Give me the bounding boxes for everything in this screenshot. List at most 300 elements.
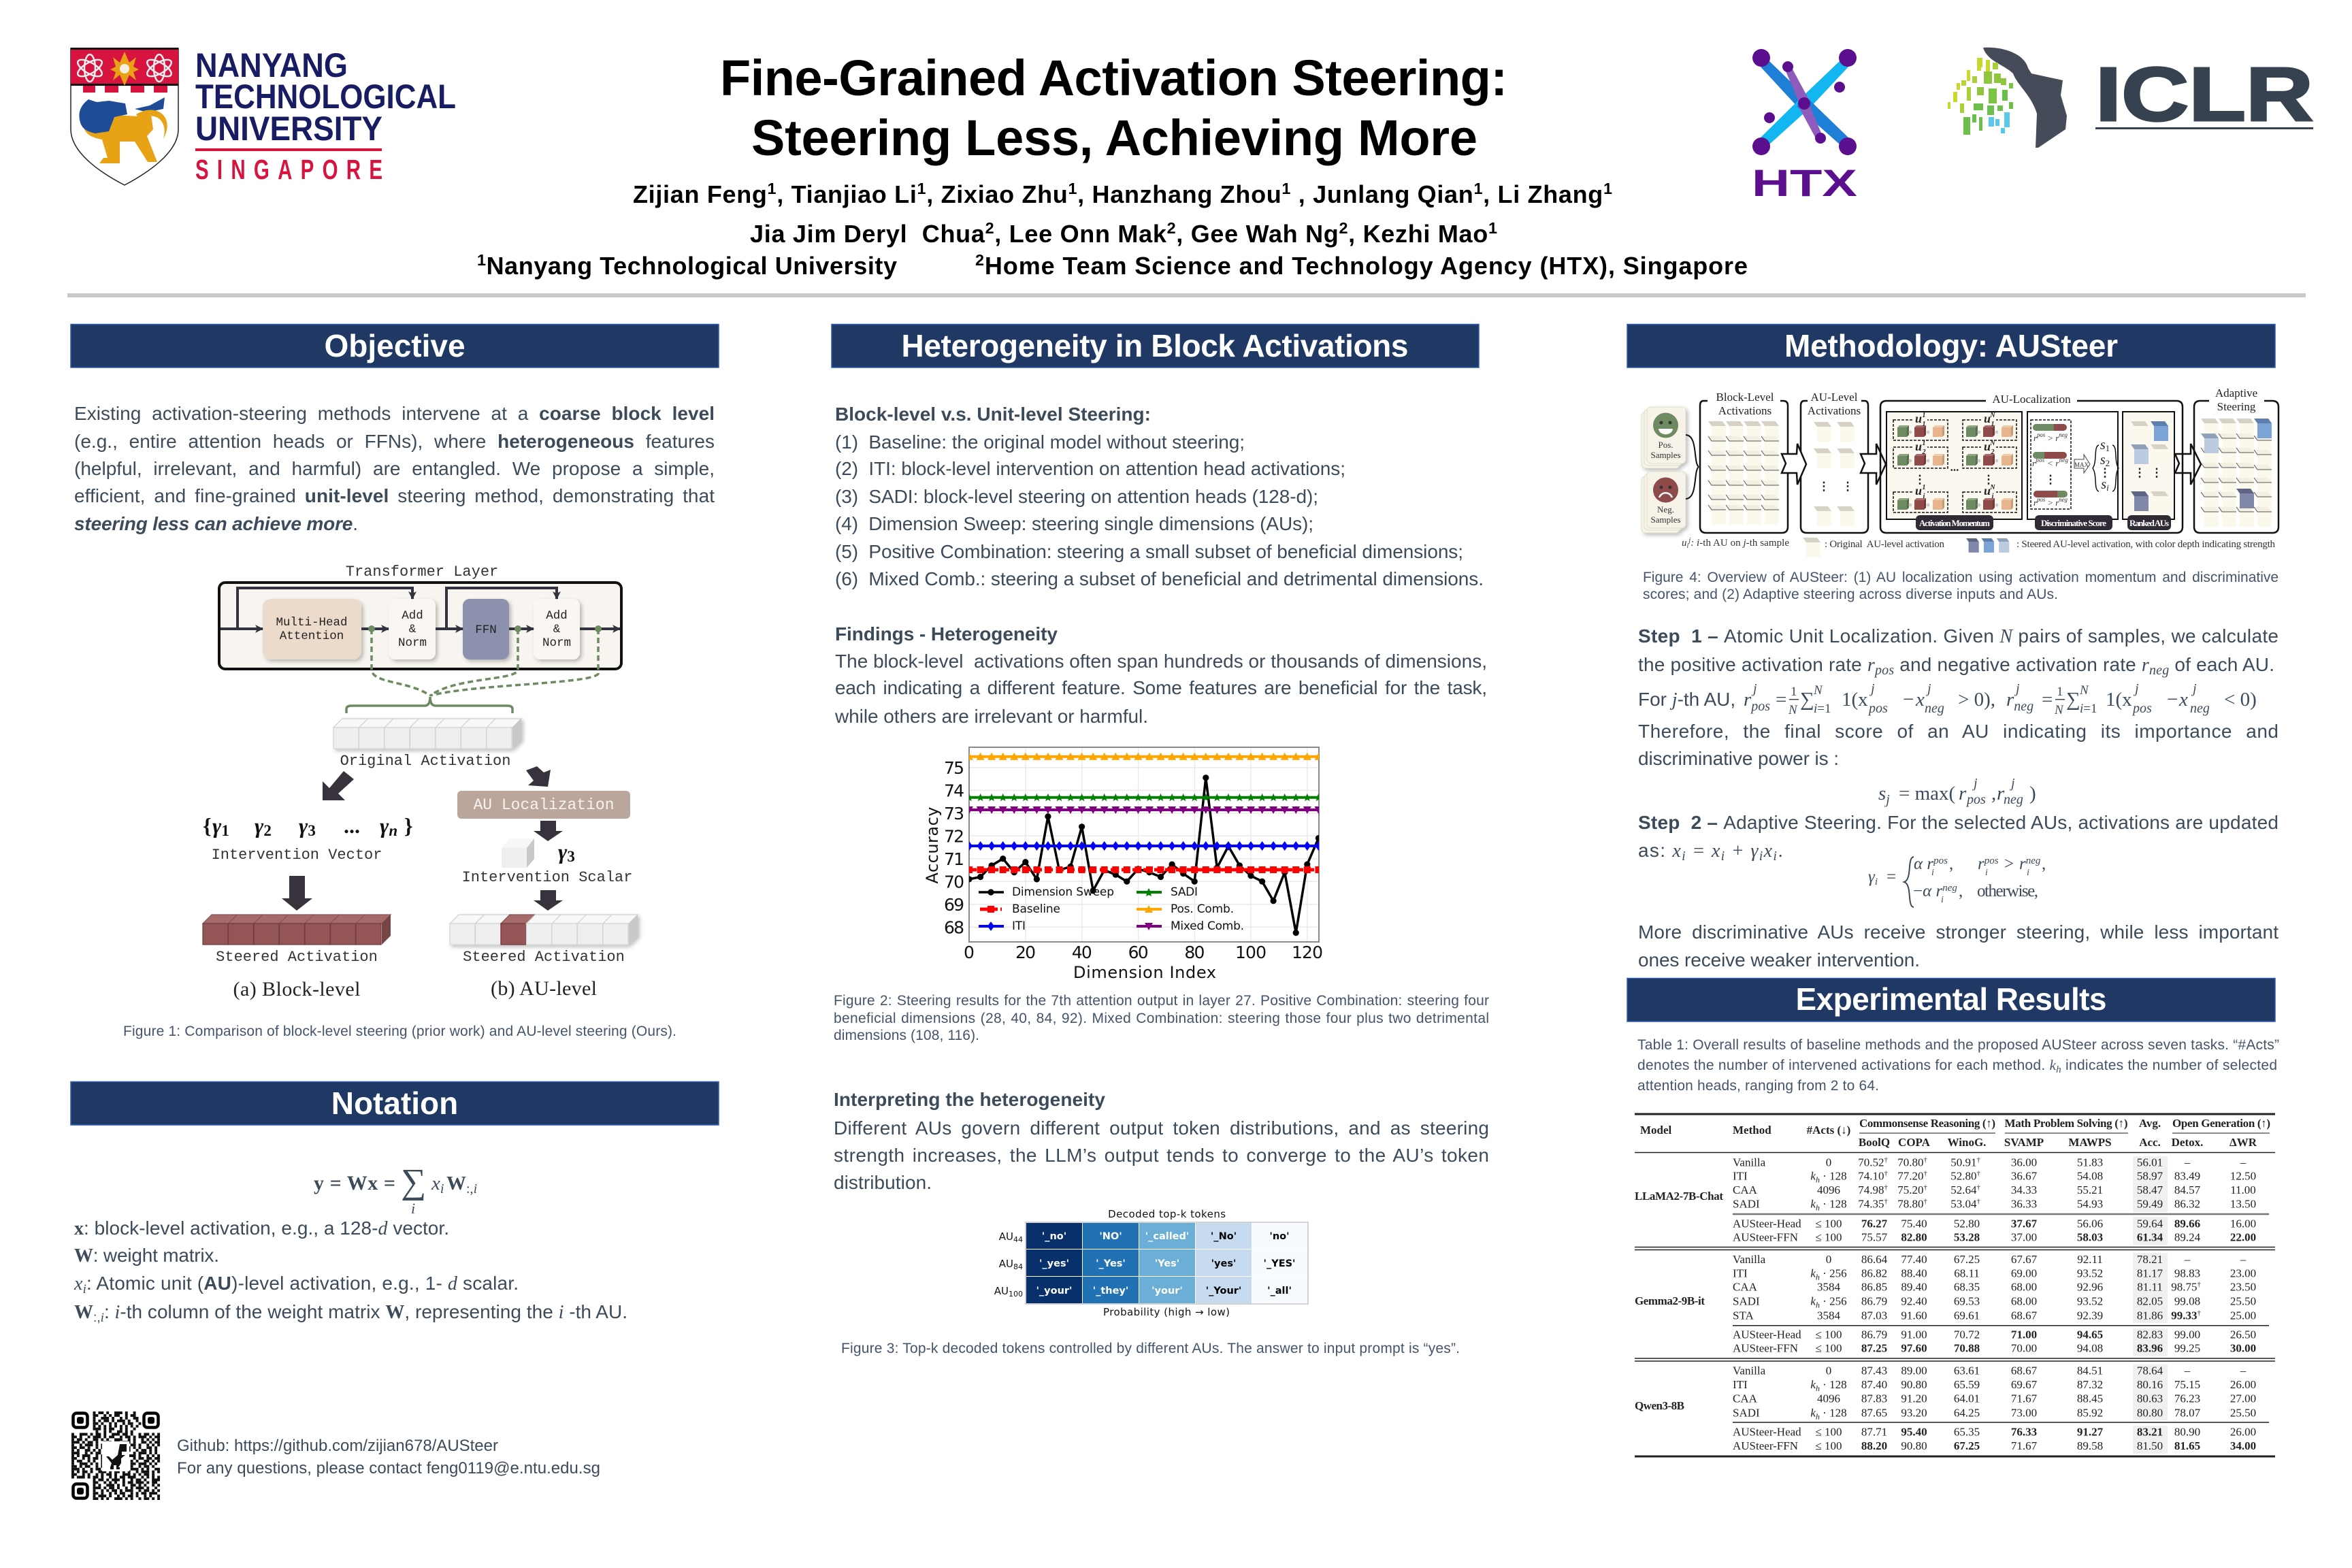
rows: Qwen3-8B: 25.50 <box>2230 1407 2256 1420</box>
rows: LLaMA2-7B-Chat: 76.27 <box>1861 1217 1888 1230</box>
rows: Gemma2-9B-it: 98.75† <box>2171 1281 2201 1294</box>
rows: Gemma2-9B-it: AUSteer-Head <box>1733 1328 1801 1341</box>
rows: LLaMA2-7B-Chat: 36.00 <box>2011 1156 2037 1169</box>
y axis ticks <box>944 758 964 938</box>
heatmap: decoded top-k tokens: '_YES' <box>1264 1258 1295 1269</box>
heading: Objective <box>71 324 719 368</box>
diagram: transformer layer block: Multi-Head <box>276 616 348 630</box>
equation: activation rates: < 0) <box>2224 689 2257 710</box>
equation: gamma piecewise: i <box>1985 868 1988 878</box>
authors and affiliations: Zijian Feng1, Tianjiao Li1, Zixiao Zhu1, Hanzhang Zhou1 , Junlang Qian1, Li Zhang1 <box>633 180 1612 208</box>
rows: Gemma2-9B-it: 70.00 <box>2011 1342 2037 1355</box>
text block: step 2 <box>1638 812 2278 864</box>
table header: Model <box>1640 1124 1672 1137</box>
rows: Gemma2-9B-it: 91.60 <box>1901 1309 1927 1322</box>
title: Steering Less, Achieving More <box>751 110 1477 166</box>
heatmap: decoded top-k tokens: '_Yes' <box>1096 1258 1126 1269</box>
figure legend: : Steered AU-level activation, with color depth indicating strength <box>2016 539 2276 550</box>
title: Fine-Grained Activation Steering: <box>720 50 1507 106</box>
rows: LLaMA2-7B-Chat: – <box>2184 1156 2191 1169</box>
icon: NTU shield <box>71 48 178 185</box>
rows: Gemma2-9B-it: 99.08 <box>2174 1295 2200 1308</box>
rows: Qwen3-8B: 87.83 <box>1861 1392 1887 1405</box>
logo wordmark: NANYANG <box>195 46 348 84</box>
equation: activation rates: j <box>2014 681 2020 696</box>
intervention vector gammas: } <box>404 813 413 838</box>
table header: COPA <box>1898 1136 1931 1149</box>
discriminative score <box>2031 420 2119 509</box>
rows: LLaMA2-7B-Chat: kh · 128 <box>1810 1169 1847 1184</box>
rows: LLaMA2-7B-Chat: 56.06 <box>2077 1217 2103 1230</box>
rows: Gemma2-9B-it: 92.39 <box>2077 1309 2103 1322</box>
activation momentum cells: u <box>1915 412 1922 425</box>
table caption: Table 1: Overall results of baseline methods and the proposed AUSteer across seven tasks. “#Acts” <box>1637 1037 2279 1053</box>
ranked AUs: ⋮ <box>2134 466 2145 479</box>
results table <box>1635 1114 2275 1456</box>
rows: Qwen3-8B: 68.67 <box>2011 1364 2038 1377</box>
table header: Open Generation (↑) <box>2172 1117 2270 1130</box>
figure legend: : Original AU-level activation <box>1825 539 1945 550</box>
equation: final score: j <box>1972 776 1978 791</box>
table header: Commonsense Reasoning (↑) <box>1859 1117 1995 1130</box>
AU-level activations box: ⋮ <box>1842 480 1854 493</box>
table header: ΔWR <box>2230 1136 2257 1149</box>
AU-level activations box: Activations <box>1808 404 1861 417</box>
x axis ticks: 100 <box>1235 943 1267 962</box>
text block: interpreting the heterogeneity: Different AUs govern different output token distributions, and as steering <box>834 1117 1489 1139</box>
heatmap: decoded top-k tokens: '_called' <box>1145 1231 1189 1242</box>
activation momentum cells: u <box>1915 440 1922 453</box>
heading: Notation: Notation <box>331 1085 458 1121</box>
authors and affiliations: Jia Jim Deryl Chua2, Lee Onn Mak2, Gee Wah Ng2, Kezhi Mao1 <box>750 219 1497 248</box>
text block: step 1: discriminative power is : <box>1638 748 1839 769</box>
y axis ticks: 68 <box>944 917 964 938</box>
header divider <box>67 293 2306 297</box>
y axis ticks: 70 <box>944 872 964 892</box>
text block: objective description: (e.g., entire attention heads or FFNs), where heterogeneous features <box>74 431 715 452</box>
table header: WinoG. <box>1948 1136 1986 1149</box>
authors and affiliations <box>477 180 1748 280</box>
equation: activation rates: ∑ <box>1800 689 1814 710</box>
rows: LLaMA2-7B-Chat: SADI <box>1733 1197 1760 1210</box>
text block: interpreting the heterogeneity: strength increases, the LLM’s output tends to converge to the AU’s token <box>834 1145 1489 1166</box>
rows: LLaMA2-7B-Chat: 89.66 <box>2174 1217 2200 1230</box>
chart legend: Baseline <box>1012 902 1060 916</box>
rows: LLaMA2-7B-Chat: 77.20† <box>1897 1169 1927 1182</box>
sample cards <box>1642 407 1699 533</box>
rows: Qwen3-8B: 76.23 <box>2174 1392 2200 1405</box>
activation momentum cells: N <box>1989 440 1995 447</box>
equation: activation rates: 1(x <box>2106 689 2132 710</box>
rows: Qwen3-8B: AUSteer-Head <box>1733 1425 1801 1438</box>
heading: Methodology: Methodology: AUSteer <box>1784 328 2118 363</box>
diagram: transformer layer block <box>219 583 621 669</box>
rows: Gemma2-9B-it: 26.50 <box>2230 1328 2256 1341</box>
rows: Qwen3-8B: CAA <box>1733 1392 1758 1405</box>
rows: Qwen3-8B: 71.67 <box>2011 1392 2038 1405</box>
rows: Gemma2-9B-it: 23.50 <box>2230 1281 2256 1294</box>
activation momentum cells: u <box>1915 484 1922 497</box>
intervention vector gammas: ... <box>344 813 360 838</box>
equation: activation rates: > 0), <box>1958 689 1995 710</box>
equation: gamma piecewise: i <box>1941 895 1944 905</box>
rows: Gemma2-9B-it: 69.61 <box>1954 1309 1980 1322</box>
table header: SVAMP <box>2004 1136 2044 1149</box>
x axis ticks: 20 <box>1015 943 1036 962</box>
label: Original Activation: Original Activation <box>340 753 510 770</box>
figure 3 caption: Figure 3: Top-k decoded tokens controlled by different AUs. The answer to input prompt is “yes”. <box>841 1341 1460 1356</box>
rows: LLaMA2-7B-Chat: 13.50 <box>2230 1197 2256 1210</box>
axis title: Accuracy: Accuracy <box>923 807 942 883</box>
equation: y = Wx: ∑ <box>401 1162 426 1201</box>
intervention vector gammas: γ2 <box>255 813 272 839</box>
rows: Gemma2-9B-it: 68.11 <box>1954 1267 1980 1280</box>
rows: Qwen3-8B: 75.15 <box>2174 1378 2200 1391</box>
rows: Gemma2-9B-it: 25.50 <box>2230 1295 2256 1308</box>
rows: Gemma2-9B-it: 25.00 <box>2230 1309 2256 1322</box>
equation: gamma piecewise: , <box>2042 855 2046 873</box>
chart legend <box>979 885 1244 933</box>
panel: Objective <box>71 324 719 1039</box>
rows: Qwen3-8B: kh · 128 <box>1810 1378 1847 1393</box>
arrow: vector to steered <box>282 876 312 911</box>
text block: step 1: the positive activation rate rpos and negative activation rate rneg of each AU. <box>1638 654 2274 678</box>
chart legend: Pos. Comb. <box>1171 902 1234 916</box>
rows: Gemma2-9B-it: 71.00 <box>2011 1328 2037 1341</box>
rows: Gemma2-9B-it: 3584 <box>1817 1281 1840 1294</box>
discriminative score: s1 <box>2100 438 2110 453</box>
rows: Gemma2-9B-it: 98.83 <box>2174 1267 2200 1280</box>
y axis ticks: 73 <box>944 804 964 823</box>
contact text <box>177 1437 600 1477</box>
equation: final score: , <box>1991 783 1996 804</box>
activation momentum cells: 1 <box>1991 421 1994 428</box>
rows: Gemma2-9B-it: 86.85 <box>1861 1281 1887 1294</box>
rows: Qwen3-8B: ≤ 100 <box>1815 1439 1842 1452</box>
rows: Gemma2-9B-it: 86.64 <box>1861 1253 1888 1266</box>
rows: Qwen3-8B: 80.63 <box>2137 1392 2163 1405</box>
equation: activation rates: x <box>2178 689 2188 710</box>
rows: Qwen3-8B: 85.92 <box>2077 1407 2103 1420</box>
heatmap: decoded top-k tokens: '_they' <box>1093 1286 1128 1296</box>
rows: Qwen3-8B: 27.00 <box>2230 1392 2256 1405</box>
equation: activation rates: rpos <box>1744 689 1770 714</box>
figure 2 caption: Figure 2: Steering results for the 7th attention output in layer 27. Positive Combination: steering four <box>834 993 1489 1009</box>
rows: Gemma2-9B-it: 0 <box>1826 1253 1831 1266</box>
equation: gamma piecewise: rpos <box>1978 855 1999 873</box>
rows: Gemma2-9B-it: 89.40 <box>1901 1281 1927 1294</box>
rows: Qwen3-8B: 64.01 <box>1954 1392 1980 1405</box>
rows: Qwen3-8B: 63.61 <box>1954 1364 1980 1377</box>
chart legend: Mixed Comb. <box>1171 919 1244 933</box>
equation: y = Wx: xi <box>431 1173 444 1196</box>
rows: Gemma2-9B-it: – <box>2240 1253 2247 1266</box>
logo: HTX <box>1752 49 1857 204</box>
AU-Localization box <box>1880 393 2183 533</box>
equation: gamma piecewise: rneg <box>2019 855 2041 873</box>
rows: Gemma2-9B-it: 87.25 <box>1861 1342 1887 1355</box>
y axis ticks: 74 <box>944 781 964 800</box>
rows: LLaMA2-7B-Chat: ≤ 100 <box>1815 1217 1842 1230</box>
text block: block vs unit level: (5) Positive Combination: steering a small subset of beneficial dimensions; <box>835 541 1463 562</box>
rows: LLaMA2-7B-Chat: 70.80† <box>1897 1156 1927 1169</box>
rows: LLaMA2-7B-Chat: 52.80† <box>1950 1169 1980 1182</box>
rows: Gemma2-9B-it: 94.65 <box>2077 1328 2103 1341</box>
rows: Gemma2-9B-it: SADI <box>1733 1295 1760 1308</box>
panel: Experimental Results <box>1627 979 2279 1456</box>
logo wordmark <box>195 46 456 185</box>
original activation cubes <box>333 719 521 749</box>
rows: Qwen3-8B: – <box>2240 1364 2247 1377</box>
heading: Heterogeneity <box>832 324 1479 368</box>
chart legend: SADI <box>1171 885 1198 899</box>
discriminative score: rpos < rneg <box>2032 457 2069 468</box>
rows: Qwen3-8B: 81.65 <box>2174 1439 2200 1452</box>
rows: Gemma2-9B-it: 82.83 <box>2137 1328 2163 1341</box>
equation: gamma piecewise: = <box>1886 868 1896 886</box>
rows: LLaMA2-7B-Chat: 52.64† <box>1950 1183 1980 1196</box>
rows: Gemma2-9B-it: 81.86 <box>2137 1309 2163 1322</box>
heatmap: decoded top-k tokens: Decoded top-k tokens <box>1108 1208 1226 1220</box>
equation: final score: j <box>2009 776 2015 791</box>
heading: Notation <box>71 1082 719 1125</box>
QR code <box>71 1413 160 1499</box>
ranked AUs <box>2131 421 2168 511</box>
heatmap: decoded top-k tokens: 'NO' <box>1099 1231 1122 1242</box>
chart legend: ITI <box>1012 919 1026 933</box>
text block: block vs unit level: Block-level v.s. Unit-level Steering: <box>835 404 1151 425</box>
heading: Methodology <box>1627 324 2275 368</box>
rows: Qwen3-8B: 89.00 <box>1901 1364 1927 1377</box>
text block: notation definitions: W:,i: i-th column of the weight matrix W, representing the i -th AU. <box>74 1301 627 1325</box>
text block: interpreting the heterogeneity <box>834 1089 1489 1193</box>
AU-Localization box: AU-Localization <box>1992 393 2071 406</box>
rows: Gemma2-9B-it: 68.35 <box>1954 1281 1980 1294</box>
chart legend: Dimension Sweep <box>1012 885 1114 899</box>
y axis ticks: 71 <box>944 849 964 869</box>
rows: Gemma2-9B-it <box>1733 1253 2256 1355</box>
rows: Qwen3-8B: 87.43 <box>1861 1364 1887 1377</box>
rows: Gemma2-9B-it: 68.67 <box>2011 1309 2038 1322</box>
rows: Gemma2-9B-it: 97.60 <box>1901 1342 1927 1355</box>
text block: discriminative steering note: More discriminative AUs receive stronger steering, while less important <box>1638 921 2278 943</box>
rows: LLaMA2-7B-Chat: Vanilla <box>1733 1156 1766 1169</box>
equation: final score: neg <box>2004 792 2023 807</box>
connector: dashed activations into brace <box>346 629 598 713</box>
diagram: transformer layer block: & <box>409 623 416 636</box>
rows: Qwen3-8B: 91.27 <box>2077 1425 2104 1438</box>
equation: final score: r <box>1959 783 1967 804</box>
rows: LLaMA2-7B-Chat: 59.64 <box>2137 1217 2163 1230</box>
adaptive steering box: Adaptive <box>2215 387 2257 399</box>
rows: Qwen3-8B: ITI <box>1733 1378 1748 1391</box>
equation: activation rates: 1 <box>2057 685 2063 699</box>
heatmap: decoded top-k tokens: '_your' <box>1036 1286 1073 1296</box>
equation: activation rates: i=1 <box>2080 702 2097 716</box>
table caption: attention heads, ranging from 2 to 64. <box>1637 1078 1879 1094</box>
activation momentum cells: 1 <box>1922 421 1926 428</box>
rows: Gemma2-9B-it: STA <box>1733 1309 1754 1322</box>
icon: head silhouette <box>1983 48 2067 148</box>
avg column shading <box>2133 1156 2168 1454</box>
rows: Qwen3-8B: 34.00 <box>2230 1439 2256 1452</box>
rows: Gemma2-9B-it: 83.96 <box>2137 1342 2163 1355</box>
activation momentum cells: 1 <box>1922 484 1926 491</box>
model labels: Gemma2-9B-it <box>1635 1294 1705 1307</box>
equation: y = Wx: W:,i <box>446 1173 477 1196</box>
rows: Qwen3-8B: 80.80 <box>2137 1407 2163 1420</box>
logo text ICLR: ICLR <box>2095 52 2313 137</box>
text block: step 1: Therefore, the final score of an AU indicating its importance and <box>1638 721 2278 742</box>
rows: Qwen3-8B: 91.20 <box>1901 1392 1927 1405</box>
heatmap: decoded top-k tokens: '_yes' <box>1039 1258 1069 1269</box>
diagram: transformer layer block: Norm <box>398 636 427 650</box>
rows: Qwen3-8B: 78.64 <box>2137 1364 2163 1377</box>
equation: gamma piecewise <box>1868 855 2046 907</box>
contact text: For any questions, please contact feng0119@e.ntu.edu.sg <box>177 1459 600 1477</box>
text block: findings <box>834 623 1487 727</box>
rows: LLaMA2-7B-Chat: 53.04† <box>1950 1197 1980 1210</box>
heading: Objective: Objective <box>324 328 466 363</box>
icon: pixel squares <box>1948 58 2013 135</box>
figure 4 caption: scores; and (2) Adaptive steering across diverse inputs and AUs. <box>1643 587 2058 602</box>
block-level activations box <box>1700 391 1788 533</box>
rows: Gemma2-9B-it: 67.25 <box>1954 1253 1980 1266</box>
rows: LLaMA2-7B-Chat: AUSteer-Head <box>1733 1217 1801 1230</box>
rows: LLaMA2-7B-Chat: 11.00 <box>2230 1183 2256 1196</box>
table header: Acc. <box>2139 1136 2161 1149</box>
x axis ticks: 120 <box>1292 943 1323 962</box>
rows: Gemma2-9B-it: 68.00 <box>2011 1281 2037 1294</box>
scalar cube and gamma: γ3 <box>558 839 575 865</box>
figure 2 caption <box>834 993 1489 1043</box>
rows: Gemma2-9B-it: 92.40 <box>1901 1295 1927 1308</box>
logo: ICLR <box>1948 48 2313 148</box>
text block: notation definitions: xi: Atomic unit (AU)-level activation, e.g., 1- d scalar. <box>74 1273 519 1296</box>
rows: Qwen3-8B: 87.65 <box>1861 1407 1887 1420</box>
label: Transformer Layer: Transformer Layer <box>346 564 498 581</box>
heading: Experimental Results: Experimental Results <box>1795 981 2107 1017</box>
heatmap: decoded top-k tokens: 'yes' <box>1211 1258 1236 1269</box>
text block: block vs unit level: (2) ITI: block-level intervention on attention head activations; <box>835 458 1345 479</box>
heatmap: decoded top-k tokens: '_No' <box>1211 1231 1237 1242</box>
text block: discriminative steering note: ones receive weaker intervention. <box>1638 949 1920 970</box>
rows: LLaMA2-7B-Chat: 22.00 <box>2230 1230 2256 1243</box>
heatmap: decoded top-k tokens: AU44 <box>999 1230 1023 1244</box>
rows: Gemma2-9B-it: 81.17 <box>2137 1267 2163 1280</box>
rows: Qwen3-8B: 95.40 <box>1901 1425 1927 1438</box>
equation: y = Wx: i <box>411 1200 415 1217</box>
equation: gamma piecewise: α rpos <box>1914 855 1948 873</box>
contact text: Github: https://github.com/zijian678/AUSteer <box>177 1437 498 1455</box>
x axis ticks <box>964 943 1323 962</box>
rows: Gemma2-9B-it: 86.79 <box>1861 1328 1887 1341</box>
equation: activation rates: neg <box>2190 701 2210 716</box>
rows: Qwen3-8B: 88.20 <box>1861 1439 1887 1452</box>
equation: activation rates: 1(x <box>1842 689 1868 710</box>
AU-level activations box: ⋮ <box>1818 480 1829 493</box>
rows: LLaMA2-7B-Chat <box>1733 1156 2256 1243</box>
rows: Gemma2-9B-it: 67.67 <box>2011 1253 2038 1266</box>
heatmap: decoded top-k tokens: '_no' <box>1042 1231 1066 1242</box>
equation: activation rates: j <box>2191 681 2197 696</box>
intervention vector gammas: γ3 <box>299 813 316 839</box>
text block: interpreting the heterogeneity: Interpreting the heterogeneity <box>834 1089 1105 1110</box>
figure 4 caption: Figure 4: Overview of AUSteer: (1) AU localization using activation momentum and discriminative <box>1643 570 2278 585</box>
text block: interpreting the heterogeneity: distribution. <box>834 1172 932 1193</box>
discriminative score: MAX <box>2074 461 2089 468</box>
rows: Gemma2-9B-it: AUSteer-FFN <box>1733 1342 1798 1355</box>
text block: block vs unit level: (6) Mixed Comb.: steering a subset of beneficial and detrimental dimensions. <box>835 568 1484 589</box>
sample cards: Samples <box>1650 514 1681 525</box>
activation momentum cells: 2 <box>1990 448 1994 456</box>
label: Steered Activation right: Steered Activation <box>463 949 625 966</box>
activation momentum cells: u <box>1984 440 1991 453</box>
equation: final score: ) <box>2029 783 2036 804</box>
rows: Gemma2-9B-it: 86.82 <box>1861 1267 1887 1280</box>
model labels <box>1635 1190 1723 1412</box>
activation momentum cells: u <box>1984 412 1991 425</box>
rows: LLaMA2-7B-Chat: 37.00 <box>2011 1230 2037 1243</box>
rows: LLaMA2-7B-Chat: 50.91† <box>1950 1156 1980 1169</box>
text block: notation definitions <box>74 1218 627 1325</box>
sample cards: Neg. <box>1657 504 1674 514</box>
equation: final score: r <box>1997 783 2005 804</box>
intervention vector gammas: γ1 <box>212 813 229 839</box>
rows: LLaMA2-7B-Chat: 34.33 <box>2011 1183 2037 1196</box>
equation: activation rates: ∑ <box>2066 689 2080 710</box>
figure 1: block-level vs AU-level steering <box>123 564 676 1039</box>
rows: Qwen3-8B: 71.67 <box>2011 1439 2038 1452</box>
rows: Gemma2-9B-it: 82.05 <box>2137 1295 2163 1308</box>
activation momentum cells: i <box>1923 493 1925 500</box>
rows: Qwen3-8B: 87.40 <box>1861 1378 1887 1391</box>
rows: Qwen3-8B: 65.59 <box>1954 1378 1980 1391</box>
text block: step 2: Step 2 – Adaptive Steering. For the selected AUs, activations are updated <box>1638 812 2278 833</box>
activation momentum cells <box>1893 412 2016 512</box>
steered activation cubes: block-level <box>203 915 391 945</box>
equation: activation rates: j <box>2133 681 2139 696</box>
rows: Gemma2-9B-it: 70.72 <box>1954 1328 1980 1341</box>
x axis ticks: 80 <box>1184 943 1205 962</box>
AU-level activations box <box>1801 391 1868 533</box>
rows: LLaMA2-7B-Chat: 37.67 <box>2011 1217 2038 1230</box>
rows: Qwen3-8B: 0 <box>1826 1364 1831 1377</box>
equation: activation rates: = <box>1776 689 1786 710</box>
panel: Notation <box>71 1082 719 1499</box>
figure 4 caption <box>1643 570 2278 602</box>
figure 1 caption: Figure 1: Comparison of block-level steering (prior work) and AU-level steering (Ours). <box>123 1024 676 1039</box>
text block: objective description: steering less can achieve more. <box>74 513 358 534</box>
text block: findings: Findings - Heterogeneity <box>835 623 1058 644</box>
rows: Qwen3-8B: kh · 128 <box>1810 1407 1847 1422</box>
table caption: denotes the number of intervened activations for each method. kh indicates the number of selected <box>1637 1057 2277 1075</box>
rows: Qwen3-8B: 87.71 <box>1861 1425 1887 1438</box>
rows: LLaMA2-7B-Chat: ITI <box>1733 1169 1748 1182</box>
sample cards: Samples <box>1650 450 1681 460</box>
label pills: Activation Momentum <box>1919 518 1990 528</box>
rows: Qwen3-8B: 76.33 <box>2011 1425 2037 1438</box>
rows: LLaMA2-7B-Chat: 75.20† <box>1897 1183 1927 1196</box>
equation: activation rates: − <box>2167 689 2178 710</box>
steered activation cubes: AU-level <box>450 915 638 945</box>
scalar cube and gamma <box>502 838 575 868</box>
activation momentum cells: ⋮ <box>1914 473 1926 486</box>
rows: Qwen3-8B: 90.80 <box>1901 1439 1927 1452</box>
rows: LLaMA2-7B-Chat: 82.80 <box>1901 1230 1927 1243</box>
diagram: transformer layer block: Norm <box>542 636 571 650</box>
rows: Gemma2-9B-it: Vanilla <box>1733 1253 1766 1266</box>
